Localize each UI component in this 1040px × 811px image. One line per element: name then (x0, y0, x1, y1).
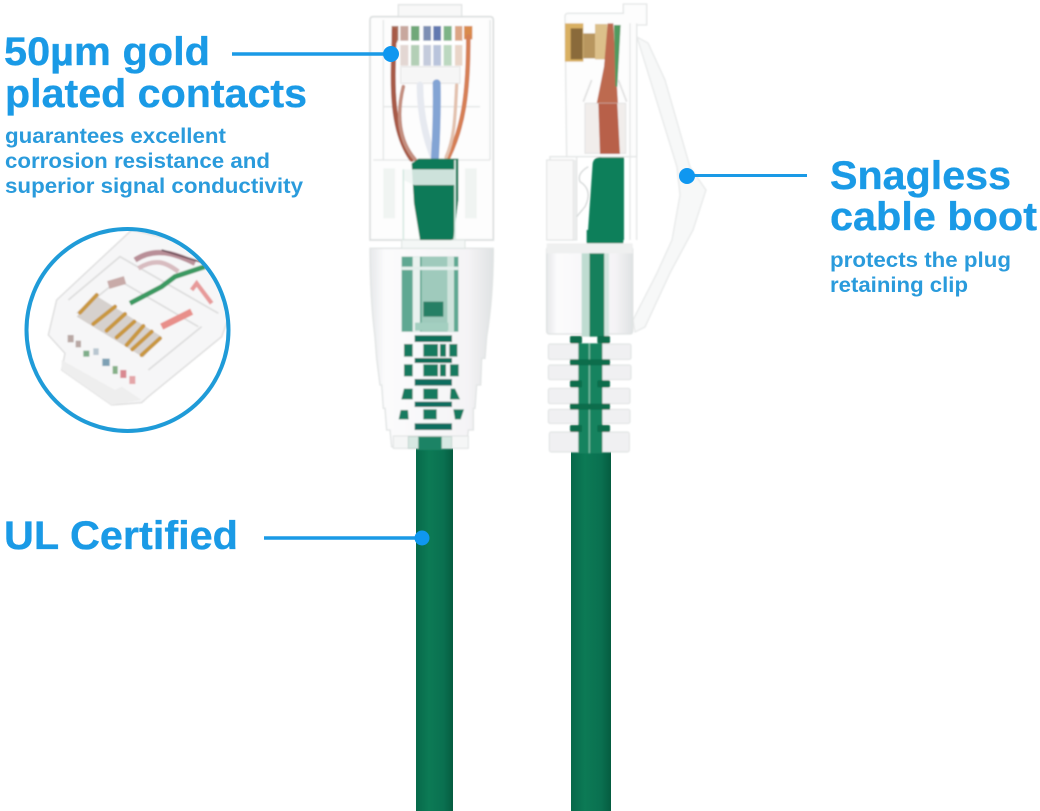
description: contacts (5, 125, 303, 198)
leader line: boot (679, 168, 807, 184)
description: boot: protects the plug (830, 249, 1011, 272)
heading: 50 micron gold plated contacts: plated contacts (5, 72, 307, 116)
heading: snagless cable boot: Snagless (830, 154, 1011, 198)
gold contact wires (392, 26, 472, 83)
heading: 50 micron gold plated contacts: 50µm gold (4, 30, 210, 74)
plug body front (370, 5, 493, 240)
green jacket side (587, 157, 624, 240)
description: contacts: superior signal conductivity (5, 175, 303, 198)
strain relief boot (370, 230, 493, 450)
inner wires (393, 30, 468, 159)
heading: 50 micron gold plated contacts (4, 30, 307, 116)
right cable (571, 448, 611, 811)
leader line: contacts (232, 46, 399, 62)
callout: UL certified (4, 514, 430, 558)
wire sleeve (585, 103, 626, 153)
right connector side view (547, 4, 706, 453)
gold contacts side (565, 23, 583, 62)
plug body side (547, 4, 647, 240)
left connector front view (370, 5, 493, 450)
callout: snagless cable boot (679, 154, 1037, 297)
description: contacts: guarantees excellent (5, 125, 226, 148)
heading: UL certified: UL Certified (4, 514, 238, 558)
description: boot: retaining clip (830, 274, 968, 297)
left cable (416, 448, 453, 811)
red wire and green wire (597, 23, 618, 103)
heading: snagless cable boot: cable boot (830, 195, 1037, 239)
side boot (547, 230, 633, 453)
plug retaining clip (633, 37, 706, 332)
inset circle: gold contact close-up (26, 229, 235, 431)
description: boot (830, 249, 1011, 297)
leader line: UL (264, 530, 430, 546)
callout: gold plated contacts (4, 30, 399, 198)
heading: snagless cable boot (830, 154, 1037, 239)
description: contacts: corrosion resistance and (5, 150, 270, 173)
green jacket in plug (412, 159, 458, 240)
angled plug illustration (48, 230, 235, 405)
